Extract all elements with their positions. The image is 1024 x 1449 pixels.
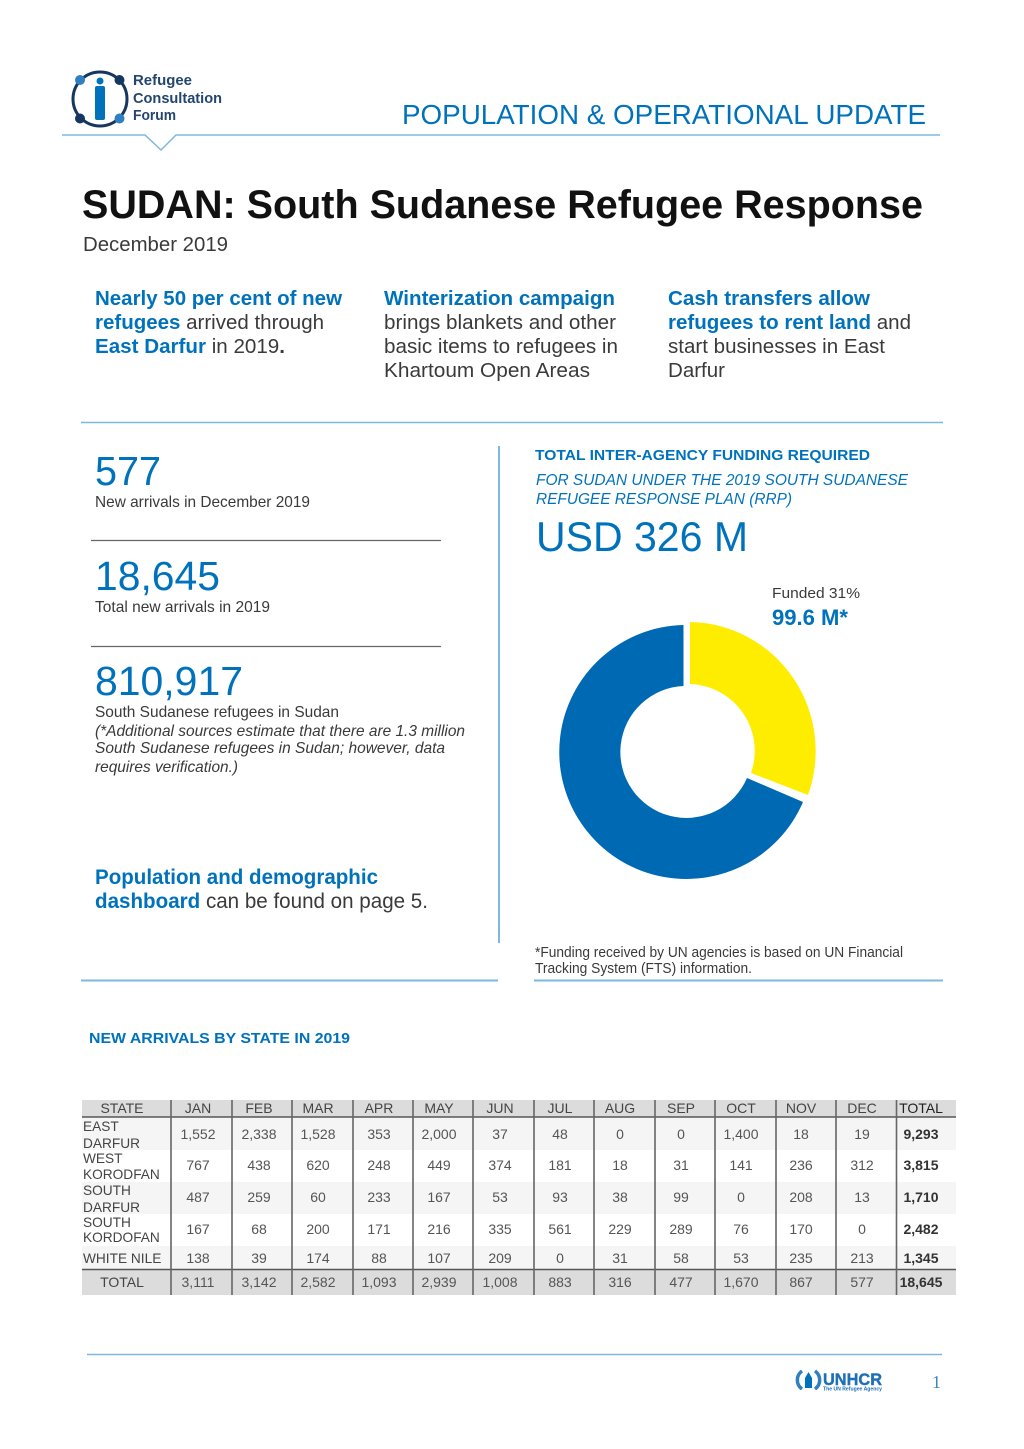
funded label bbox=[772, 585, 860, 630]
row: White Nile: 31 bbox=[612, 1250, 628, 1266]
row: South Kordofan: 167 bbox=[186, 1221, 210, 1237]
stat: South Sudanese refugees in Sudan: requires verification.) bbox=[95, 759, 238, 776]
row: East Darfur: 48 bbox=[552, 1126, 568, 1142]
header label: POPULATION & OPERATIONAL UPDATE bbox=[402, 99, 926, 130]
highlight: new refugees: East Darfur in 2019. bbox=[95, 336, 285, 358]
table header row: MAY bbox=[424, 1100, 454, 1116]
row: White Nile: 58 bbox=[673, 1250, 689, 1266]
row: White Nile: 107 bbox=[427, 1250, 451, 1266]
date: December 2019 bbox=[83, 234, 228, 256]
row: White Nile: 138 bbox=[186, 1250, 210, 1266]
row: West Korodfan: 18 bbox=[612, 1157, 628, 1173]
row: West Korodfan: WEST bbox=[83, 1151, 123, 1166]
row: Total: 316 bbox=[608, 1274, 632, 1290]
row: West Korodfan: 181 bbox=[548, 1157, 572, 1173]
row: South Darfur: 93 bbox=[552, 1189, 568, 1205]
row: South Darfur: 38 bbox=[612, 1189, 628, 1205]
highlight: new refugees bbox=[95, 288, 342, 358]
highlight: new refugees: refugees arrived through bbox=[95, 312, 324, 334]
row: East Darfur: 1,552 bbox=[180, 1126, 216, 1142]
row: South Darfur: 99 bbox=[673, 1189, 689, 1205]
row: South Kordofan: SOUTH bbox=[83, 1215, 131, 1230]
stat: new arrivals in December: New arrivals in December 2019 bbox=[95, 494, 310, 511]
row: Total: 3,142 bbox=[241, 1274, 277, 1290]
funded label: Funded 31% bbox=[772, 585, 860, 602]
row: White Nile bbox=[83, 1250, 939, 1266]
row: White Nile: 39 bbox=[251, 1250, 267, 1266]
logo: UNHCR bbox=[797, 1370, 882, 1392]
table header row: STATE bbox=[100, 1100, 144, 1116]
highlight: winterization: basic items to refugees in bbox=[384, 336, 618, 358]
stat: South Sudanese refugees in Sudan: South Sudanese refugees in Sudan bbox=[95, 704, 339, 721]
table header row: OCT bbox=[726, 1100, 756, 1116]
highlight: winterization: Winterization campaign bbox=[384, 288, 615, 310]
logo: UNHCR: The UN Refugee Agency bbox=[823, 1386, 882, 1392]
row: South Kordofan: 68 bbox=[251, 1221, 267, 1237]
row: White Nile: 53 bbox=[733, 1250, 749, 1266]
highlight: cash transfers: start businesses in East bbox=[668, 336, 885, 358]
highlight: winterization: Khartoum Open Areas bbox=[384, 360, 590, 382]
row: West Korodfan: 620 bbox=[306, 1157, 330, 1173]
table header row: AUG bbox=[605, 1100, 635, 1116]
row: South Darfur: 487 bbox=[186, 1189, 210, 1205]
table header row bbox=[100, 1100, 943, 1116]
row: South Kordofan: 171 bbox=[367, 1221, 391, 1237]
table header row: DEC bbox=[847, 1100, 877, 1116]
row: South Darfur: 13 bbox=[854, 1189, 870, 1205]
title: SUDAN: South Sudanese Refugee Response bbox=[82, 183, 923, 227]
row: West Korodfan: 374 bbox=[488, 1157, 512, 1173]
row: White Nile: WHITE NILE bbox=[83, 1251, 161, 1266]
row: West Korodfan: 767 bbox=[186, 1157, 210, 1173]
row: East Darfur: 2,000 bbox=[421, 1126, 457, 1142]
table header row: MAR bbox=[302, 1100, 334, 1116]
highlight: winterization: brings blankets and other bbox=[384, 312, 616, 334]
highlight: cash transfers: Cash transfers allow bbox=[668, 288, 870, 310]
row: South Darfur: 233 bbox=[367, 1189, 391, 1205]
row: East Darfur: 1,400 bbox=[723, 1126, 759, 1142]
stat: South Sudanese refugees in Sudan: South Sudanese refugees in Sudan; however, data bbox=[95, 740, 445, 757]
row: East Darfur: 19 bbox=[854, 1126, 870, 1142]
row: West Korodfan: 449 bbox=[427, 1157, 451, 1173]
row: Total bbox=[100, 1274, 943, 1290]
funded label: 99.6 M* bbox=[772, 605, 848, 630]
row: West Korodfan: 31 bbox=[673, 1157, 689, 1173]
logo: Refugee Consultation Forum: Consultation bbox=[133, 90, 222, 107]
funding heading bbox=[535, 447, 908, 508]
stat: total new arrivals: Total new arrivals in 2019 bbox=[95, 599, 270, 616]
row: West Korodfan: 248 bbox=[367, 1157, 391, 1173]
logo: Refugee Consultation Forum bbox=[73, 72, 222, 126]
table heading: NEW ARRIVALS BY STATE IN 2019 bbox=[89, 1030, 350, 1047]
row: Total: 477 bbox=[669, 1274, 693, 1290]
row: South Kordofan bbox=[83, 1215, 939, 1245]
row: South Darfur: 167 bbox=[427, 1189, 451, 1205]
page number: 1 bbox=[932, 1372, 941, 1392]
table header row: TOTAL bbox=[899, 1100, 943, 1116]
highlight: new refugees: Nearly 50 per cent of new bbox=[95, 288, 342, 310]
row: South Kordofan: KORDOFAN bbox=[83, 1230, 160, 1245]
row: White Nile: 1,345 bbox=[903, 1250, 939, 1266]
row: East Darfur: 9,293 bbox=[903, 1126, 939, 1142]
row: White Nile: 88 bbox=[371, 1250, 387, 1266]
row: White Nile: 209 bbox=[488, 1250, 512, 1266]
highlight: winterization bbox=[384, 288, 618, 382]
row: South Kordofan: 335 bbox=[488, 1221, 512, 1237]
row: South Kordofan: 200 bbox=[306, 1221, 330, 1237]
row: Total: 18,645 bbox=[900, 1274, 943, 1290]
funding heading: REFUGEE RESPONSE PLAN (RRP) bbox=[536, 491, 792, 508]
row: East Darfur bbox=[83, 1119, 939, 1151]
dashboard note bbox=[95, 866, 428, 913]
row: West Korodfan bbox=[83, 1151, 939, 1182]
stat: South Sudanese refugees in Sudan: (*Additional sources estimate that there are 1.3 million bbox=[95, 723, 465, 740]
funding footnote: Tracking System (FTS) information. bbox=[535, 961, 752, 977]
row: South Kordofan: 170 bbox=[789, 1221, 813, 1237]
row: Total: 2,939 bbox=[421, 1274, 457, 1290]
row: South Darfur: 1,710 bbox=[903, 1189, 939, 1205]
funding amount: USD 326 M bbox=[536, 513, 748, 560]
row: South Kordofan: 2,482 bbox=[903, 1221, 939, 1237]
unfunded segment bbox=[559, 625, 803, 879]
row: West Korodfan: 312 bbox=[850, 1157, 874, 1173]
row: West Korodfan: 236 bbox=[789, 1157, 813, 1173]
row: Total: 883 bbox=[548, 1274, 572, 1290]
row: White Nile: 213 bbox=[850, 1250, 874, 1266]
highlight: cash transfers bbox=[668, 288, 911, 382]
row: East Darfur: 37 bbox=[492, 1126, 508, 1142]
row: East Darfur: 0 bbox=[616, 1126, 624, 1142]
table header row: NOV bbox=[786, 1100, 817, 1116]
stat: South Sudanese refugees in Sudan bbox=[95, 658, 465, 776]
row: South Kordofan: 229 bbox=[608, 1221, 632, 1237]
row: East Darfur: 353 bbox=[367, 1126, 391, 1142]
row: West Korodfan: 438 bbox=[247, 1157, 271, 1173]
row: South Darfur: 208 bbox=[789, 1189, 813, 1205]
logo: Refugee Consultation Forum: Refugee bbox=[133, 72, 192, 89]
logo: UNHCR: UNHCR bbox=[823, 1370, 882, 1389]
row: Total: 1,670 bbox=[723, 1274, 759, 1290]
row: South Darfur: DARFUR bbox=[83, 1200, 140, 1215]
table header row: JUN bbox=[486, 1100, 514, 1116]
header rule with chevron bbox=[62, 135, 940, 150]
stat: total new arrivals: 18,645 bbox=[95, 553, 220, 599]
dashboard note: Population and demographic bbox=[95, 866, 378, 889]
row: South Darfur: 60 bbox=[310, 1189, 326, 1205]
highlight: cash transfers: refugees to rent land and bbox=[668, 312, 911, 334]
row: South Kordofan: 76 bbox=[733, 1221, 749, 1237]
funding footnote: *Funding received by UN agencies is based on UN Financial bbox=[535, 945, 903, 961]
table: new arrivals by state bbox=[82, 1100, 956, 1295]
funded segment bbox=[690, 622, 816, 795]
row: Total: 1,093 bbox=[361, 1274, 397, 1290]
row: Total: TOTAL bbox=[100, 1274, 144, 1290]
row: West Korodfan: 3,815 bbox=[903, 1157, 939, 1173]
row: Total: 2,582 bbox=[300, 1274, 336, 1290]
highlight: cash transfers: Darfur bbox=[668, 360, 725, 382]
row: West Korodfan: 141 bbox=[729, 1157, 753, 1173]
row: East Darfur: DARFUR bbox=[83, 1136, 140, 1151]
stat: new arrivals in December: 577 bbox=[95, 448, 161, 494]
row: South Darfur bbox=[83, 1183, 939, 1215]
row: South Kordofan: 289 bbox=[669, 1221, 693, 1237]
row: South Kordofan: 561 bbox=[548, 1221, 572, 1237]
table header row: JUL bbox=[548, 1100, 573, 1116]
table header row: FEB bbox=[245, 1100, 273, 1116]
row: White Nile: 235 bbox=[789, 1250, 813, 1266]
row: East Darfur: 2,338 bbox=[241, 1126, 277, 1142]
logo: Refugee Consultation Forum: Forum bbox=[133, 107, 176, 124]
stat: total new arrivals bbox=[95, 553, 270, 616]
row: East Darfur: 0 bbox=[677, 1126, 685, 1142]
row: Total: 867 bbox=[789, 1274, 813, 1290]
table header row: APR bbox=[365, 1100, 393, 1116]
row: West Korodfan: KORODFAN bbox=[83, 1167, 160, 1182]
row: Total: 577 bbox=[850, 1274, 874, 1290]
funding heading: TOTAL INTER-AGENCY FUNDING REQUIRED bbox=[535, 447, 870, 464]
stat: new arrivals in December bbox=[95, 448, 310, 511]
funding footnote bbox=[535, 945, 903, 977]
row: South Darfur: 259 bbox=[247, 1189, 271, 1205]
funding heading: FOR SUDAN UNDER THE 2019 SOUTH SUDANESE bbox=[536, 472, 908, 489]
row: South Darfur: 0 bbox=[737, 1189, 745, 1205]
dashboard note: dashboard can be found on page 5. bbox=[95, 890, 428, 913]
row: South Darfur: SOUTH bbox=[83, 1183, 131, 1198]
row: South Kordofan: 0 bbox=[858, 1221, 866, 1237]
stat: South Sudanese refugees in Sudan: 810,917 bbox=[95, 658, 243, 704]
row: South Darfur: 53 bbox=[492, 1189, 508, 1205]
donut chart: funding bbox=[559, 622, 816, 879]
table header row: JAN bbox=[185, 1100, 211, 1116]
row: Total: 1,008 bbox=[482, 1274, 518, 1290]
row: East Darfur: 18 bbox=[793, 1126, 809, 1142]
row: Total: 3,111 bbox=[182, 1274, 215, 1290]
row: South Kordofan: 216 bbox=[427, 1221, 451, 1237]
table header row: SEP bbox=[667, 1100, 695, 1116]
row: White Nile: 174 bbox=[306, 1250, 330, 1266]
row: East Darfur: 1,528 bbox=[300, 1126, 336, 1142]
row: White Nile: 0 bbox=[556, 1250, 564, 1266]
row: East Darfur: EAST bbox=[83, 1119, 119, 1134]
